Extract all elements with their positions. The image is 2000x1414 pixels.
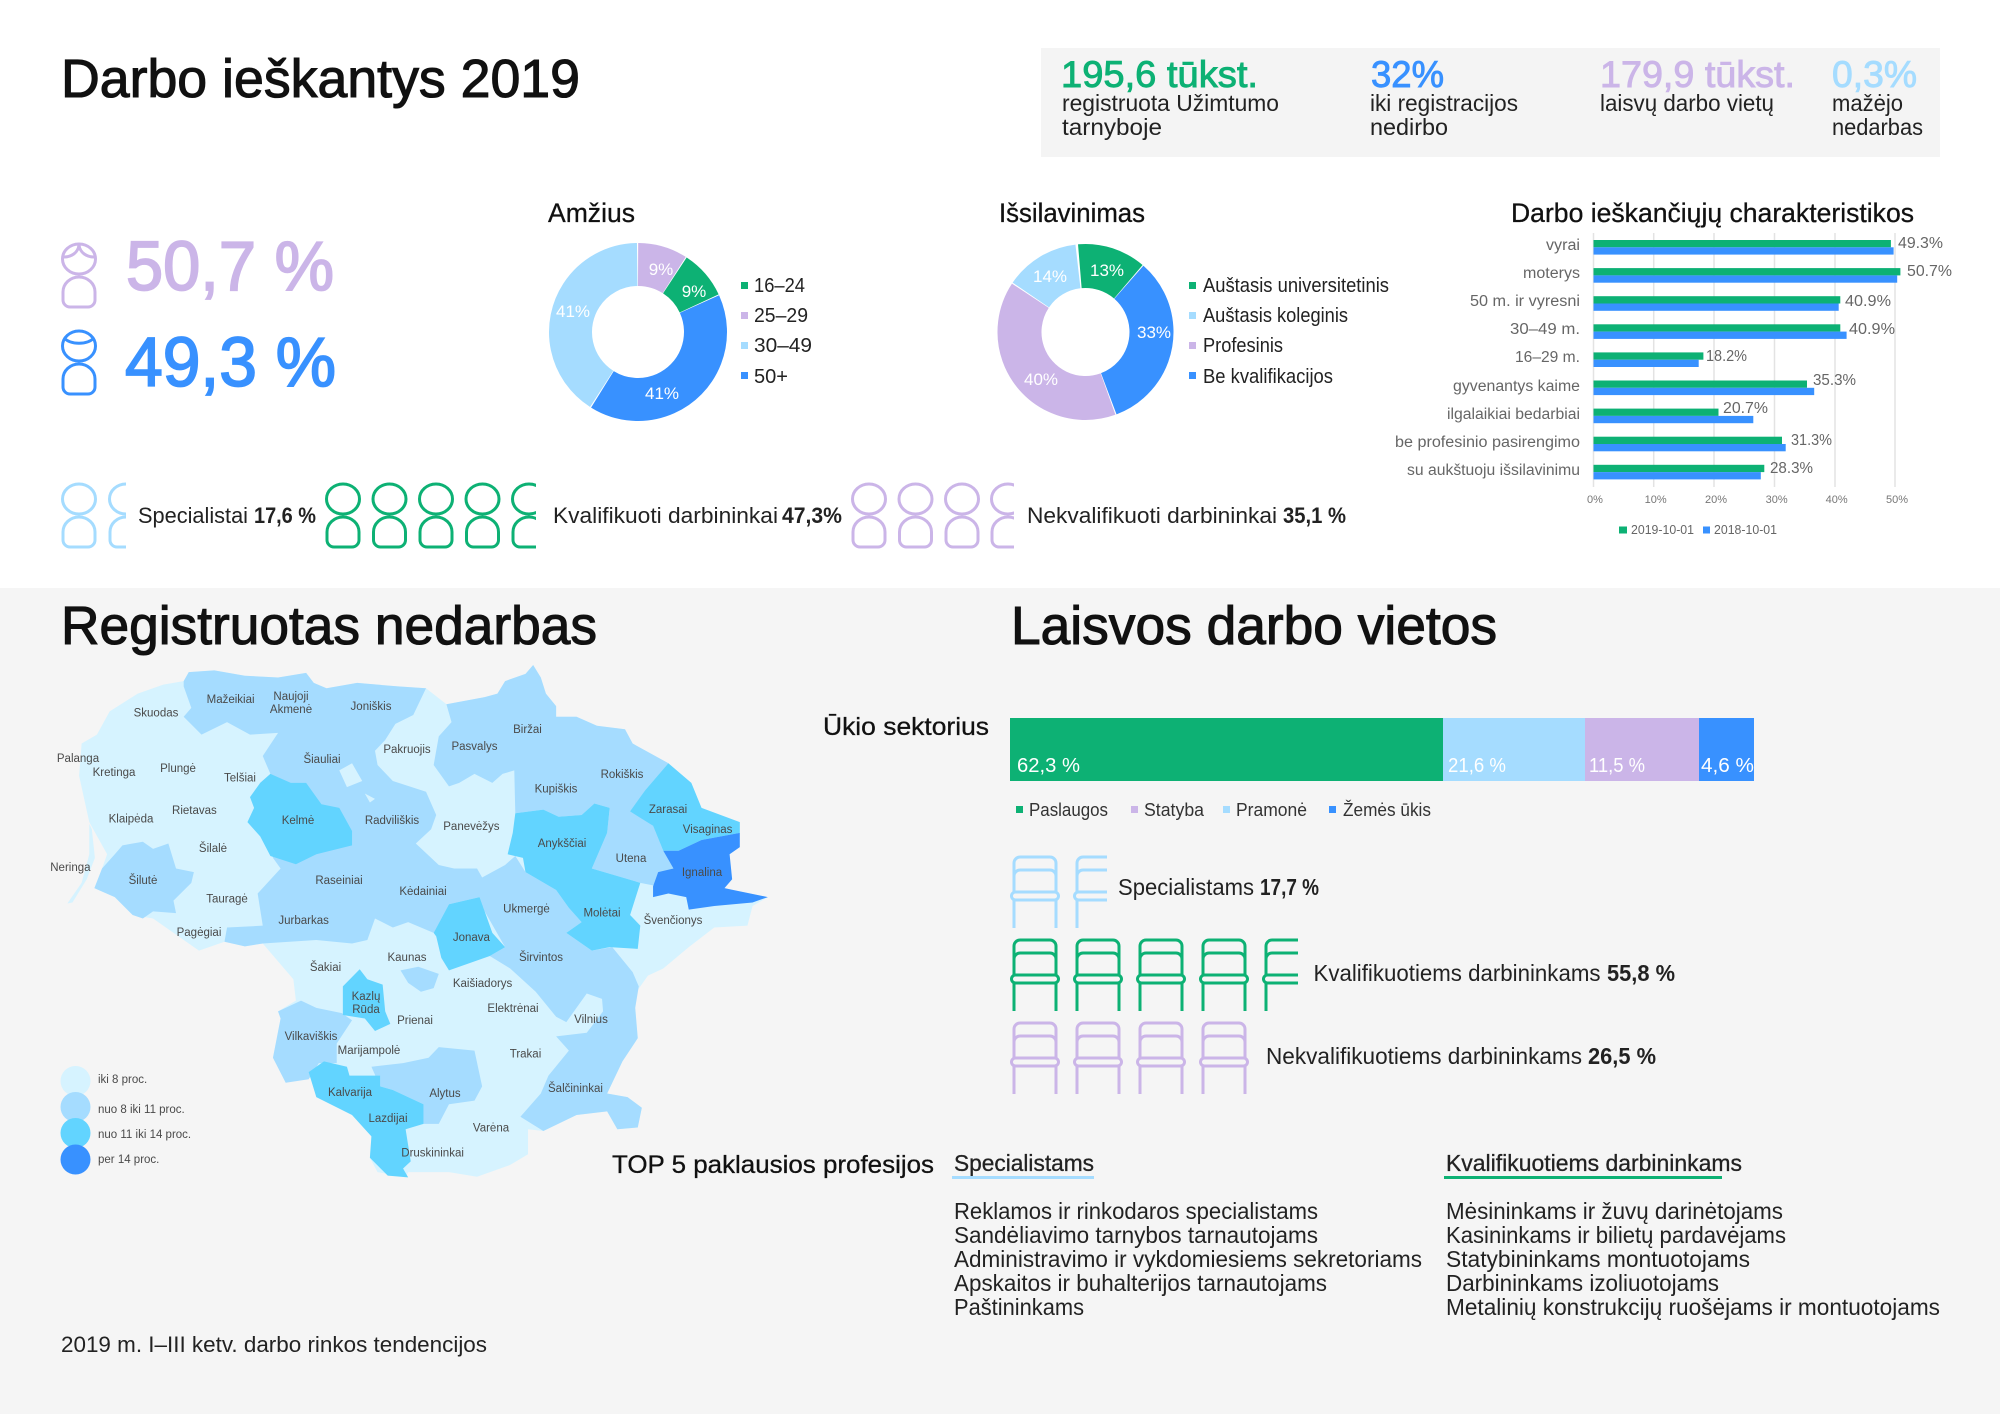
map labels: Klaipėda: [109, 814, 154, 826]
category labels: moterys: [1523, 265, 1580, 282]
donut chart: education: 14%: [1033, 267, 1067, 286]
legend: education: Profesinis: [1203, 335, 1283, 357]
category labels: gyvenantys kaime: [1453, 378, 1580, 395]
list: specialists: Apskaitos ir buhalterijos tarnautojams: [954, 1270, 1327, 1296]
donut chart: age: [544, 238, 732, 426]
map labels: Prienai: [397, 1015, 433, 1027]
chart legend: [1619, 523, 1777, 537]
list: skilled workers: Metalinių konstrukcijų ruošėjams ir montuotojams: [1446, 1294, 1940, 1320]
axis labels: 40%: [1826, 494, 1848, 506]
value labels: 49.3%: [1898, 235, 1943, 252]
list: skilled workers: Statybininkams montuotojams: [1446, 1246, 1750, 1272]
stat: registered: registruota Užimtumo: [1062, 90, 1279, 116]
map labels: Rietavas: [172, 805, 217, 817]
label: skilled workers: 47,3%: [782, 503, 842, 528]
donut chart: age: 9%: [682, 282, 706, 301]
map labels: Vilnius: [574, 1014, 608, 1026]
map labels: Pakruojis: [383, 744, 431, 756]
category labels: 50 m. ir vyresni: [1470, 293, 1580, 310]
map labels: Joniškis: [351, 701, 392, 713]
stat: never worked: 32%: [1371, 54, 1444, 95]
footer note: 2019 m. I–III ketv. darbo rinkos tendencijos: [61, 1332, 487, 1357]
heading: economic sector: Ūkio sektorius: [823, 713, 989, 741]
map labels: Kretinga: [93, 767, 136, 779]
label: skilled workers: Kvalifikuoti darbininkai: [553, 503, 778, 528]
bottom section background: [0, 588, 2000, 1414]
category labels: vyrai: [1546, 237, 1580, 254]
map labels: Ukmergė: [503, 904, 550, 916]
stacked bar: economic sector: 21,6 %: [1448, 755, 1506, 777]
value labels: 28.3%: [1770, 460, 1813, 477]
map legend: nuo 11 iki 14 proc.: [98, 1129, 191, 1141]
label: unskilled workers: 35,1 %: [1283, 503, 1346, 528]
map labels: Zarasai: [649, 804, 687, 816]
label: vacancies for skilled workers: 55,8 %: [1607, 960, 1675, 986]
icons: unskilled workers: [852, 484, 1024, 547]
map labels: Kelmė: [282, 815, 314, 827]
map labels: Tauragė: [206, 894, 248, 906]
axis labels: [1587, 494, 1908, 506]
chart legend: 2019-10-01: [1631, 523, 1694, 537]
map labels: Kupiškis: [535, 784, 578, 796]
map legend: per 14 proc.: [98, 1154, 159, 1166]
map labels: Kaunas: [387, 952, 427, 964]
legend: age: [741, 275, 812, 388]
category labels: 30–49 m.: [1510, 321, 1580, 338]
stacked bar: economic sector: 4,6 %: [1701, 755, 1754, 777]
map labels: Plungė: [160, 763, 196, 775]
value labels: 50.7%: [1907, 263, 1952, 280]
map labels: Kazlų: [352, 991, 380, 1003]
legend: age: 16–24: [754, 275, 805, 297]
women share: 50,7 %: [126, 227, 334, 305]
icons: chairs for skilled workers: [1012, 940, 1310, 1011]
list: skilled workers: Darbininkams izoliuotojams: [1446, 1270, 1719, 1296]
donut chart: education: 33%: [1137, 323, 1171, 342]
map labels: Šiauliai: [303, 753, 341, 766]
map labels: Naujoji: [273, 691, 309, 703]
value labels: 40.9%: [1849, 321, 1895, 338]
map labels: Palanga: [57, 753, 100, 765]
legend: age: 30–49: [754, 335, 812, 357]
legend: education: Be kvalifikacijos: [1203, 366, 1333, 388]
list: specialists: Paštininkams: [954, 1294, 1084, 1320]
map labels: Šakiai: [310, 961, 341, 974]
map legend: iki 8 proc.: [98, 1074, 147, 1086]
map labels: Druskininkai: [401, 1148, 464, 1160]
map labels: Elektrėnai: [487, 1003, 539, 1015]
heading: jobseeker characteristics: Darbo ieškančiųjų charakteristikos: [1511, 198, 1914, 228]
map labels: Rūda: [352, 1004, 380, 1016]
heading: registered unemployment: Registruotas nedarbas: [61, 596, 597, 656]
list: specialists: [952, 1150, 1422, 1320]
stat: vacancies: [1600, 54, 1795, 116]
map labels: Švenčionys: [644, 914, 703, 927]
stacked bar: economic sector: 11,5 %: [1589, 755, 1645, 777]
legend: age: 50+: [754, 366, 788, 388]
map labels: Lazdijai: [368, 1113, 408, 1125]
map labels: Panevėžys: [443, 821, 500, 833]
map labels: Rokiškis: [601, 769, 644, 781]
chart legend: 2018-10-01: [1714, 523, 1777, 537]
axis labels: 50%: [1886, 494, 1908, 506]
axis labels: 20%: [1705, 494, 1727, 506]
map labels: [50, 691, 733, 1160]
category labels: [1395, 237, 1580, 479]
icons: chairs for unskilled workers: [1012, 1023, 1248, 1094]
stat: vacancies: 179,9 tūkst.: [1600, 54, 1795, 95]
label: specialists: 17,6 %: [254, 503, 316, 528]
map labels: Pasvalys: [451, 741, 498, 753]
value labels: 31.3%: [1791, 432, 1832, 449]
donut chart: age: 41%: [645, 384, 679, 403]
icons: skilled workers: [326, 484, 546, 547]
map labels: Utena: [616, 853, 647, 865]
legend: sectors: Paslaugos: [1029, 800, 1108, 820]
list: skilled workers: Mėsininkams ir žuvų darinėtojams: [1446, 1198, 1783, 1224]
legend: sectors: [1016, 800, 1431, 820]
legend: sectors: Statyba: [1144, 800, 1205, 820]
map labels: Ignalina: [682, 867, 723, 879]
map legend: [60, 1066, 191, 1174]
map labels: Biržai: [513, 724, 542, 736]
map labels: Radviliškis: [365, 815, 419, 827]
map labels: Pagėgiai: [177, 927, 221, 939]
map labels: Neringa: [50, 862, 91, 874]
map labels: Varėna: [473, 1122, 510, 1134]
map labels: Raseiniai: [315, 875, 363, 887]
map labels: Vilkaviškis: [285, 1031, 338, 1043]
heading: top 5 professions: TOP 5 paklausios profesijos: [612, 1151, 934, 1179]
icons: specialists: [62, 484, 142, 547]
map labels: Skuodas: [134, 708, 179, 720]
legend: age: 25–29: [754, 305, 808, 327]
axis labels: 0%: [1587, 494, 1603, 506]
donut chart: education: 13%: [1090, 261, 1124, 280]
donut chart: education: [992, 239, 1179, 425]
list: skilled workers: [1444, 1150, 1940, 1320]
map labels: Mažeikiai: [207, 694, 255, 706]
legend: education: Auštasis koleginis: [1203, 305, 1348, 327]
map labels: Kėdainiai: [399, 886, 447, 898]
map: Lithuania unemployment: [50, 665, 768, 1177]
map labels: Alytus: [429, 1088, 461, 1100]
category labels: su aukštuoju išsilavinimu: [1407, 462, 1580, 479]
map legend: nuo 8 iki 11 proc.: [98, 1104, 185, 1116]
stat: unemployment decrease: mažėjo: [1832, 90, 1903, 116]
map labels: Kalvarija: [328, 1087, 373, 1099]
legend: education: [1189, 275, 1389, 388]
map labels: Širvintos: [519, 951, 563, 964]
legend: education: Auštasis universitetinis: [1203, 275, 1389, 297]
category labels: ilgalaikiai bedarbiai: [1447, 406, 1580, 423]
label: vacancies for unskilled workers: Nekvalifikuotiems darbininkams: [1266, 1043, 1582, 1069]
map labels: Trakai: [510, 1048, 541, 1060]
label: specialists: Specialistai: [138, 503, 248, 528]
icon: woman: [62, 244, 96, 307]
label: specialists: [138, 503, 316, 528]
map labels: Šilalė: [199, 842, 227, 855]
stacked bar: economic sector: 62,3 %: [1017, 755, 1080, 777]
label: vacancies for specialists: 17,7 %: [1260, 874, 1319, 900]
axis labels: 30%: [1766, 494, 1788, 506]
icon: man: [62, 331, 96, 394]
label: vacancies for unskilled workers: 26,5 %: [1588, 1043, 1656, 1069]
category labels: be profesinio pasirengimo: [1395, 434, 1580, 451]
map labels: Jonava: [453, 932, 491, 944]
heading: education: Išsilavinimas: [999, 198, 1145, 228]
list: specialists: Reklamos ir rinkodaros specialistams: [954, 1198, 1318, 1224]
value labels: 35.3%: [1813, 372, 1856, 389]
stat: never worked: nedirbo: [1370, 114, 1448, 140]
map labels: Šalčininkai: [548, 1082, 603, 1095]
value labels: 20.7%: [1723, 400, 1768, 417]
label: unskilled workers: Nekvalifikuoti darbininkai: [1027, 503, 1277, 528]
list: specialists: Specialistams: [954, 1150, 1094, 1176]
map labels: Jurbarkas: [278, 915, 329, 927]
stat: unemployment decrease: [1832, 54, 1923, 140]
label: vacancies for specialists: Specialistams: [1118, 874, 1254, 900]
map labels: Molėtai: [583, 908, 621, 920]
stat: never worked: [1370, 54, 1518, 140]
list: specialists: Administravimo ir vykdomiesiems sekretoriams: [954, 1246, 1422, 1272]
heading: age: Amžius: [548, 198, 635, 228]
title: Darbo ieškantys 2019: [61, 49, 580, 109]
map labels: Marijampolė: [338, 1045, 400, 1057]
map labels: Visaginas: [683, 824, 733, 836]
bar chart: jobseeker characteristics: [1395, 233, 1952, 537]
stat: vacancies: laisvų darbo vietų: [1600, 90, 1774, 116]
category labels: 16–29 m.: [1515, 349, 1580, 366]
stat: registered: tarnyboje: [1062, 114, 1162, 140]
legend: sectors: Pramonė: [1236, 800, 1307, 820]
map labels: Akmenė: [270, 704, 312, 716]
stat: never worked: iki registracijos: [1370, 90, 1518, 116]
map labels: Telšiai: [224, 772, 256, 784]
legend: sectors: Žemės ūkis: [1343, 800, 1431, 820]
donut chart: education: 40%: [1024, 370, 1058, 389]
list: specialists: Sandėliavimo tarnybos tarnautojams: [954, 1222, 1318, 1248]
stat: registered: [1061, 54, 1279, 140]
list: skilled workers: Kvalifikuotiems darbininkams: [1446, 1150, 1742, 1176]
list: skilled workers: Kasininkams ir bilietų pardavėjams: [1446, 1222, 1786, 1248]
donut chart: age: 41%: [556, 302, 590, 321]
stat: unemployment decrease: 0,3%: [1832, 54, 1917, 95]
stat: registered: 195,6 tūkst.: [1061, 54, 1258, 95]
value labels: [1706, 235, 1952, 477]
stat: unemployment decrease: nedarbas: [1832, 114, 1923, 140]
map labels: Kaišiadorys: [453, 978, 513, 990]
label: vacancies for skilled workers: Kvalifikuotiems darbininkams: [1314, 960, 1600, 986]
panel: key statistics: [1041, 48, 1940, 157]
map labels: Anykščiai: [538, 838, 586, 850]
value labels: 18.2%: [1706, 348, 1747, 365]
value labels: 40.9%: [1845, 293, 1891, 310]
men share: 49,3 %: [125, 323, 336, 401]
map labels: Šilutė: [129, 874, 157, 887]
icons: chairs for specialists: [1012, 857, 1122, 928]
axis labels: 10%: [1645, 494, 1667, 506]
donut chart: age: 9%: [649, 260, 673, 279]
stacked bar: economic sector: [1010, 718, 1754, 781]
heading: vacancies: Laisvos darbo vietos: [1011, 596, 1497, 656]
